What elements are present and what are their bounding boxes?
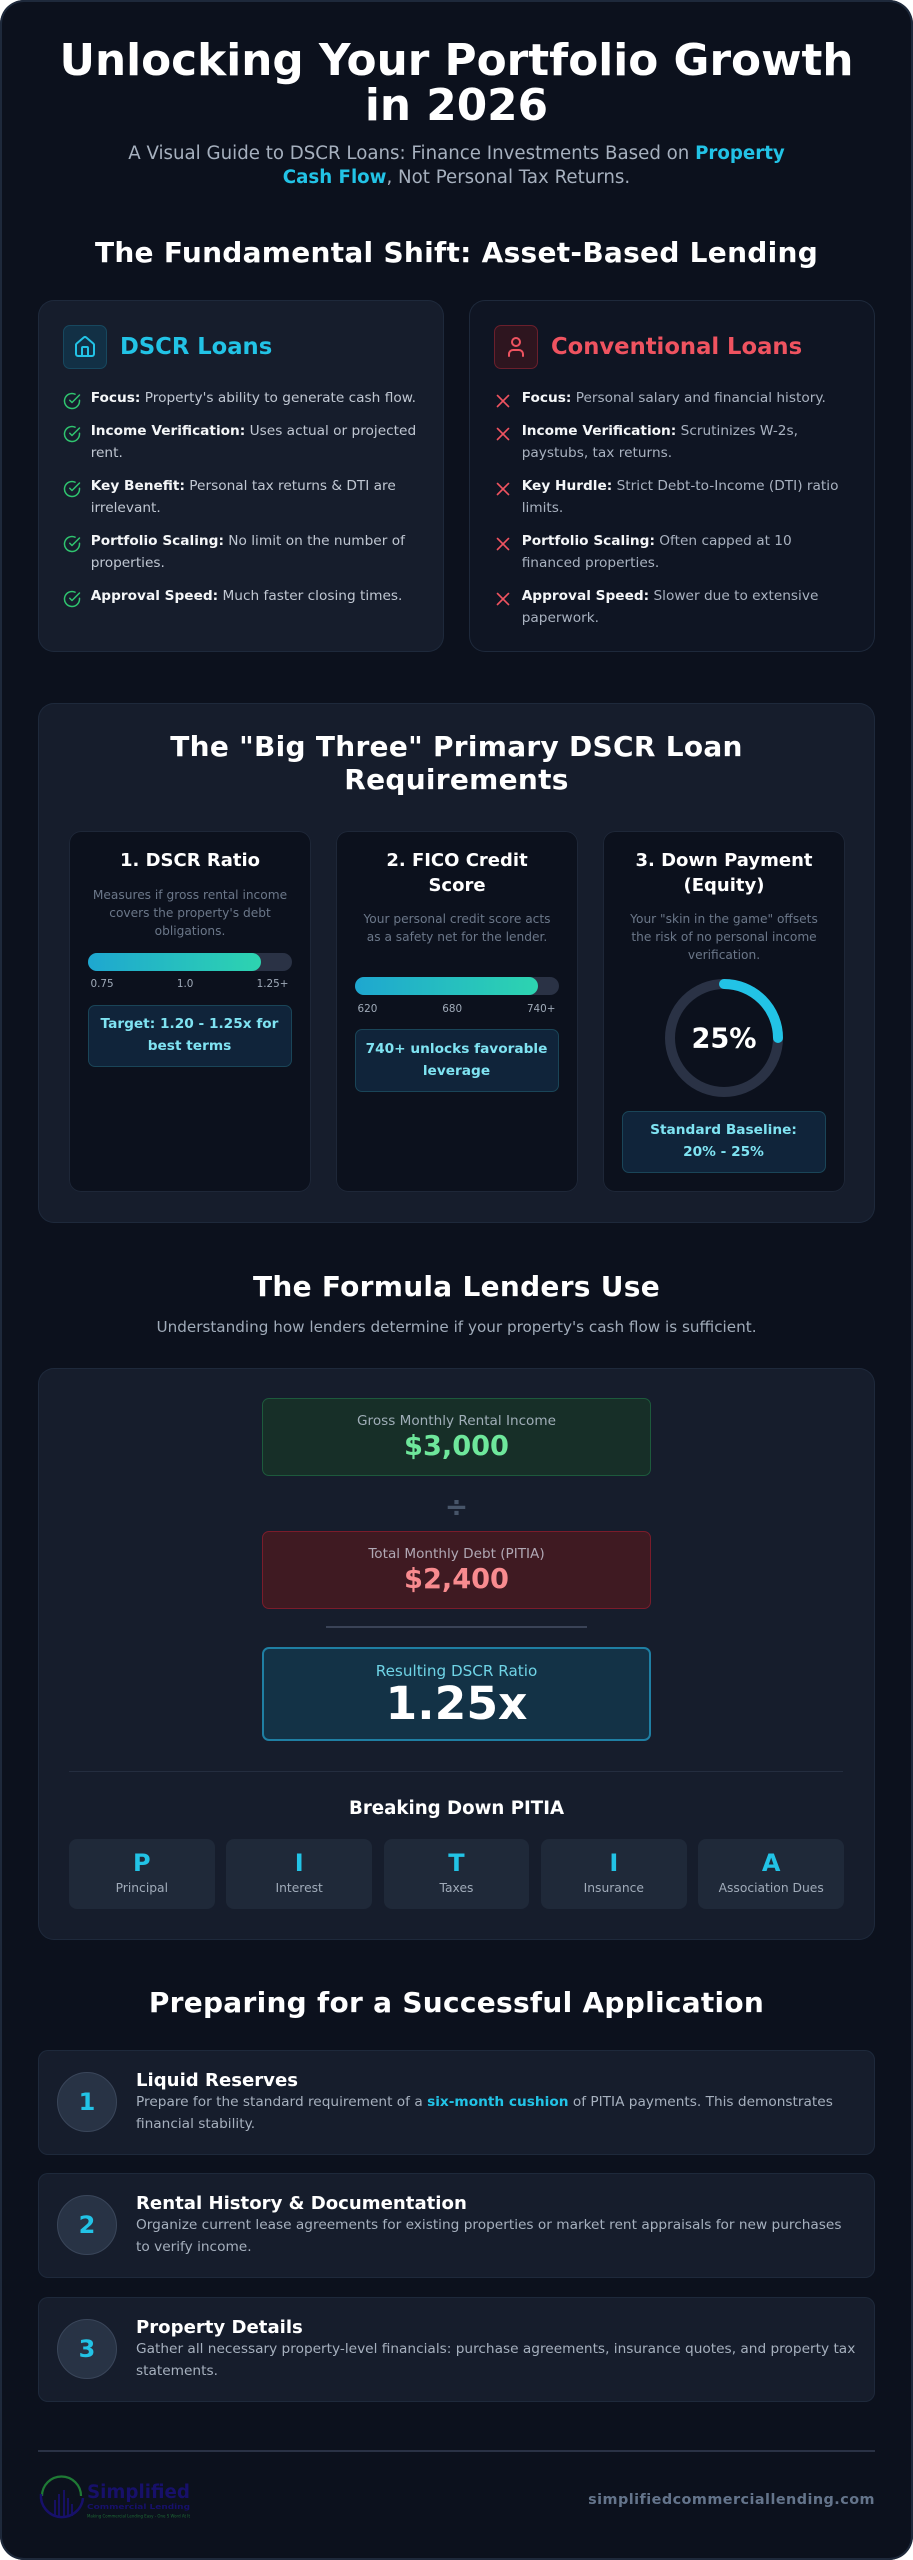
icon: house xyxy=(63,325,107,369)
card description: Your personal credit score acts xyxy=(363,912,551,926)
checklist: DSCR features: rent. xyxy=(91,445,123,461)
callout: 740+: leverage xyxy=(423,1062,490,1078)
box: gross income xyxy=(262,1398,651,1476)
value: $2,400 xyxy=(404,1564,509,1595)
divider xyxy=(69,1771,843,1772)
logo xyxy=(40,2475,190,2518)
callout: baseline: 20% - 25% xyxy=(683,1144,764,1160)
PITIA: association dues xyxy=(698,1839,844,1909)
card: DSCR ratio xyxy=(69,831,311,1192)
callout: baseline xyxy=(622,1111,826,1173)
step description xyxy=(136,2217,841,2255)
logo: Making Commercial Lending Easy - One S Word At It xyxy=(87,2514,190,2518)
scale labels: 620 xyxy=(358,1003,377,1015)
PITIA: interest: Interest xyxy=(275,1880,323,1894)
callout: 740+ xyxy=(354,1029,558,1092)
box: total debt xyxy=(262,1531,651,1609)
heading: PITIA: Breaking Down PITIA xyxy=(349,1798,564,1819)
donut chart: 25% xyxy=(665,979,783,1097)
scale labels: 680 xyxy=(442,1003,462,1015)
step description: statements. xyxy=(136,2363,218,2379)
panel: formula xyxy=(38,1368,875,1940)
heading: conventional loans: Conventional Loans xyxy=(551,334,802,360)
icon: divide: ÷ xyxy=(445,1490,468,1523)
step title: Liquid Reserves xyxy=(136,2070,298,2091)
card title: 1. DSCR Ratio xyxy=(120,850,260,871)
step 1: liquid reserves xyxy=(38,2050,875,2155)
scale labels: 1.25+ xyxy=(257,978,288,990)
card description xyxy=(630,912,818,962)
formula subtitle: Understanding how lenders determine if your property's cash flow is sufficient. xyxy=(156,1318,757,1336)
title xyxy=(59,35,854,131)
card: FICO credit score xyxy=(336,831,578,1192)
donut chart: 25%: 25% xyxy=(691,1024,756,1054)
step description: Prepare for the standard requirement of a six-month cushion of PITIA payments. This demonstrates xyxy=(136,2094,833,2110)
number badge xyxy=(57,2195,117,2255)
card: down payment xyxy=(603,831,845,1192)
progress bar: DSCR xyxy=(88,953,292,971)
card description: Your "skin in the game" offsets xyxy=(630,912,818,926)
card description xyxy=(93,888,287,938)
footer rule xyxy=(38,2450,875,2452)
PITIA: insurance: I xyxy=(609,1849,618,1877)
panel: big three requirements xyxy=(38,703,875,1223)
list: conventional drawbacks: Key Hurdle: Strict Debt-to-Income (DTI) ratio xyxy=(522,478,838,494)
panel: DSCR loans xyxy=(38,300,444,652)
step description: financial stability. xyxy=(136,2116,255,2132)
icon: person xyxy=(494,325,538,369)
card title xyxy=(386,850,528,896)
PITIA: association dues: A xyxy=(762,1849,780,1877)
checklist: DSCR features: Focus: Property's ability to generate cash flow. xyxy=(91,390,416,406)
list: conventional drawbacks: paperwork. xyxy=(522,610,599,626)
PITIA: principal xyxy=(69,1839,215,1909)
card title: (Equity) xyxy=(684,875,764,896)
card description: as a safety net for the lender. xyxy=(367,930,547,944)
scale labels xyxy=(90,978,288,990)
step description: to verify income. xyxy=(136,2239,252,2255)
list: conventional drawbacks: limits. xyxy=(522,500,563,516)
card description: covers the property's debt xyxy=(109,906,271,920)
label: Gross Monthly Rental Income xyxy=(357,1413,556,1429)
subtitle: Cash Flow, Not Personal Tax Returns. xyxy=(283,167,630,188)
checklist: DSCR features: Key Benefit: Personal tax returns & DTI are xyxy=(91,478,396,494)
step title: Rental History & Documentation xyxy=(136,2193,467,2214)
PITIA: taxes xyxy=(384,1839,529,1909)
step description xyxy=(136,2341,855,2379)
card title: 2. FICO Credit xyxy=(386,850,528,871)
number badge: 2 xyxy=(79,2211,95,2239)
label: Resulting DSCR Ratio xyxy=(376,1662,537,1680)
heading: big three: The "Big Three" Primary DSCR Loan xyxy=(170,730,743,762)
scale labels: 740+ xyxy=(527,1003,555,1015)
PITIA: insurance xyxy=(541,1839,687,1909)
list: conventional drawbacks: Income Verification: Scrutinizes W-2s, xyxy=(522,423,798,439)
card title: 3. Down Payment xyxy=(635,850,813,871)
heading: fundamental shift: The Fundamental Shift: Asset-Based Lending xyxy=(95,236,818,269)
step description xyxy=(136,2094,833,2132)
step description: Organize current lease agreements for existing properties or market rent appraisals for new purchases xyxy=(136,2217,841,2233)
card title: Score xyxy=(428,875,486,896)
list: conventional drawbacks: Focus: Personal salary and financial history. xyxy=(522,390,826,406)
PITIA: taxes: T xyxy=(448,1849,465,1877)
value: 1.25x xyxy=(386,1677,527,1730)
callout: target xyxy=(88,1005,292,1067)
heading: DSCR loans: DSCR Loans xyxy=(120,334,272,360)
PITIA: interest: I xyxy=(295,1849,304,1877)
card description: verification. xyxy=(688,948,760,962)
number badge xyxy=(57,2319,117,2379)
box: result xyxy=(262,1647,651,1741)
step description: Gather all necessary property-level financials: purchase agreements, insurance quotes, and property tax xyxy=(136,2341,855,2357)
card title xyxy=(635,850,813,896)
PITIA: principal: Principal xyxy=(116,1880,168,1894)
card description: the risk of no personal income xyxy=(631,930,817,944)
number badge xyxy=(57,2072,117,2132)
PITIA: taxes: Taxes xyxy=(440,1880,473,1894)
list: conventional drawbacks xyxy=(496,390,838,626)
list: conventional drawbacks: paystubs, tax returns. xyxy=(522,445,672,461)
number badge: 1 xyxy=(79,2088,95,2116)
checklist: DSCR features: Approval Speed: Much faster closing times. xyxy=(91,588,402,604)
callout: 740+: 740+ unlocks favorable xyxy=(366,1041,547,1057)
logo: Simplified xyxy=(87,2482,190,2503)
card description xyxy=(363,912,551,944)
number badge: 3 xyxy=(79,2335,95,2363)
checklist: DSCR features: properties. xyxy=(91,555,165,571)
step title: Property Details xyxy=(136,2317,303,2338)
subtitle: A Visual Guide to DSCR Loans: Finance Investments Based on Property xyxy=(128,143,785,164)
value: $3,000 xyxy=(404,1431,509,1462)
scale labels xyxy=(358,1003,555,1015)
list: conventional drawbacks: financed properties. xyxy=(522,555,659,571)
PITIA: association dues: Association Dues xyxy=(719,1880,824,1894)
checklist: DSCR features: Income Verification: Uses actual or projected xyxy=(91,423,416,439)
callout: target: best terms xyxy=(148,1038,231,1054)
heading: preparing: Preparing for a Successful Application xyxy=(149,1986,764,2019)
title: Unlocking Your Portfolio Growth xyxy=(59,35,854,86)
fraction line xyxy=(326,1626,587,1628)
scale labels: 0.75 xyxy=(90,978,114,990)
checklist: DSCR features xyxy=(64,390,416,608)
PITIA: interest xyxy=(226,1839,372,1909)
panel: conventional loans xyxy=(469,300,875,652)
list: conventional drawbacks: Approval Speed: Slower due to extensive xyxy=(522,588,818,604)
callout: baseline: Standard Baseline: xyxy=(650,1122,797,1138)
step 3: property details xyxy=(38,2297,875,2402)
card description: obligations. xyxy=(155,924,225,938)
label: Total Monthly Debt (PITIA) xyxy=(368,1546,545,1562)
heading: big three xyxy=(170,730,743,796)
PITIA: insurance: Insurance xyxy=(584,1880,644,1894)
scale labels: 1.0 xyxy=(177,978,193,990)
progress bar: FICO xyxy=(354,977,558,995)
list: conventional drawbacks: Portfolio Scaling: Often capped at 10 xyxy=(522,533,792,549)
heading: big three: Requirements xyxy=(344,763,569,796)
checklist: DSCR features: irrelevant. xyxy=(91,500,161,516)
heading: formula: The Formula Lenders Use xyxy=(253,1270,660,1303)
logo: Commercial Lending xyxy=(87,2503,190,2511)
PITIA: principal: P xyxy=(133,1849,151,1877)
website url: simplifiedcommerciallending.com xyxy=(588,2492,875,2508)
subtitle xyxy=(128,143,785,188)
checklist: DSCR features: Portfolio Scaling: No limit on the number of xyxy=(91,533,405,549)
callout: target: Target: 1.20 - 1.25x for xyxy=(101,1016,278,1032)
step 2: rental history xyxy=(38,2173,875,2278)
card description: Measures if gross rental income xyxy=(93,888,287,902)
title: in 2026 xyxy=(365,80,548,131)
